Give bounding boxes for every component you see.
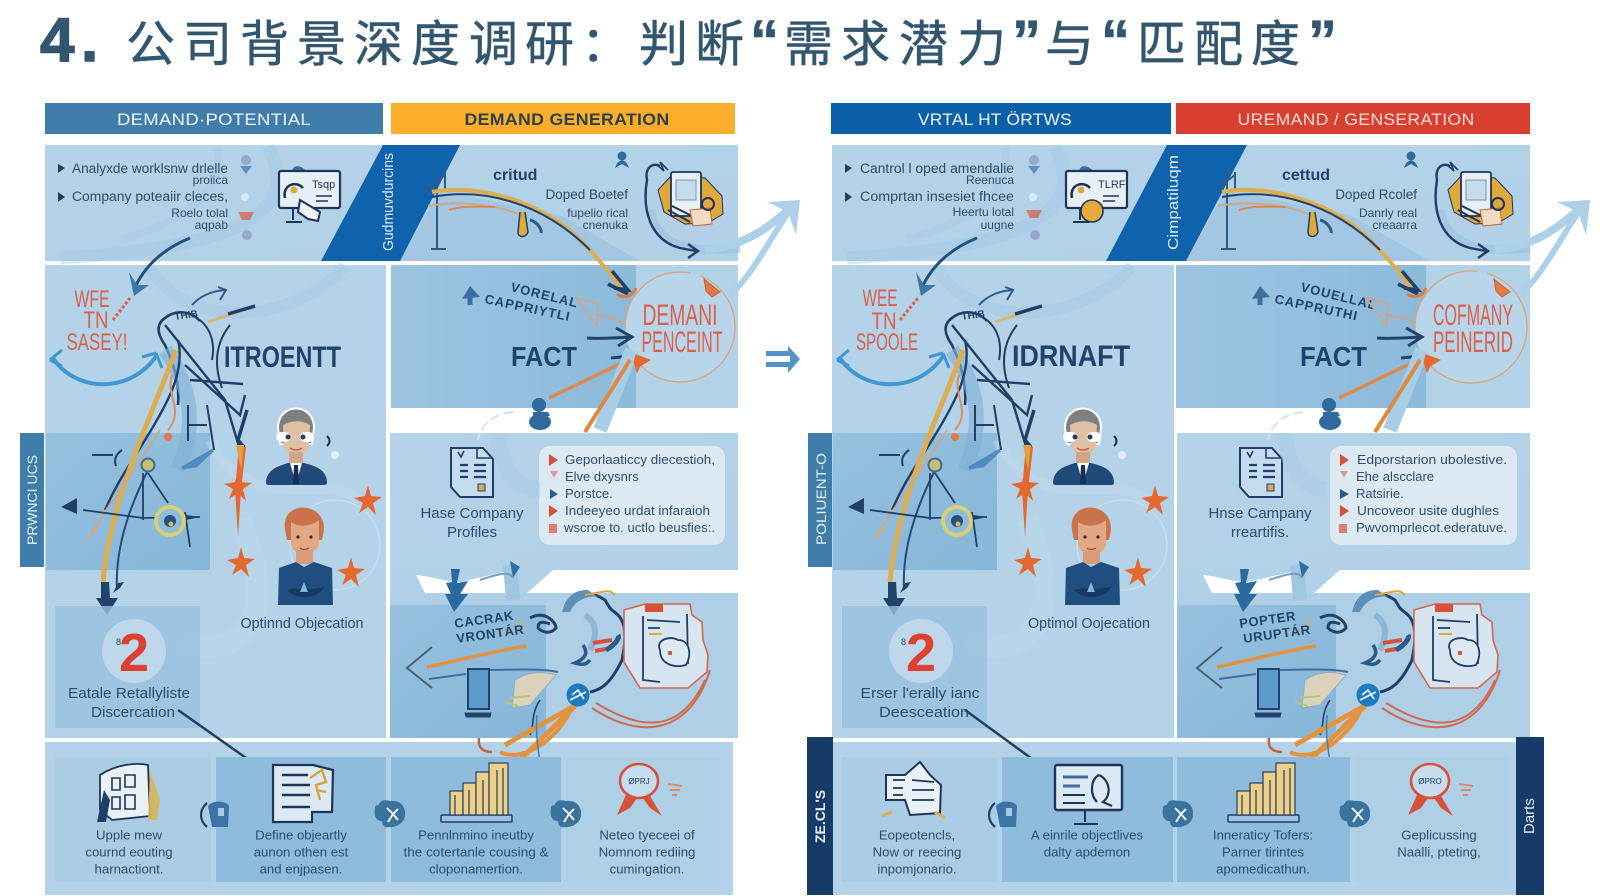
- bullet list: top left: [845, 161, 1014, 232]
- circle: red lettering: PEINERID: [1433, 326, 1513, 359]
- bullet list: top left: Reenuca: [966, 173, 1014, 187]
- caption: person: Optinnd Objecation: [240, 615, 364, 632]
- bullet list: top left: [58, 161, 228, 232]
- text: cettud block: cettud: [1282, 167, 1330, 184]
- card: step 4: Nomnom rediing: [599, 844, 695, 860]
- card: step 4: [1355, 757, 1510, 882]
- handwritten label: lower sketch: [1238, 608, 1312, 646]
- person marker: [478, 398, 551, 440]
- red handwritten note: TN: [84, 307, 108, 334]
- handwritten labels: VORELAL: [509, 279, 580, 311]
- title: ”: [1308, 9, 1337, 74]
- card: step 4: ØPRO: [1418, 777, 1442, 786]
- handwritten label: lower sketch: POPTER: [1238, 608, 1297, 631]
- header: demand generation: DEMAND GENERATION: [464, 110, 670, 129]
- bullet list: top left: Analyxde worklsnw drlelle: [72, 161, 228, 176]
- handwritten label: lower sketch: CACRAK: [453, 608, 515, 631]
- panel: lower sketch block: [390, 593, 738, 738]
- icon: monitor with hand: Tsqp: [312, 179, 335, 191]
- icon: package sketch: [658, 172, 723, 226]
- handwritten labels: VOUELLAL: [1299, 279, 1379, 313]
- icon: report: [1414, 604, 1498, 688]
- right layout: [807, 103, 1590, 895]
- card: number 2: [55, 606, 200, 728]
- top centre curves: [1215, 170, 1426, 296]
- panel: bottom band: [833, 742, 1516, 895]
- icon: report: [624, 604, 708, 688]
- caption: company profiles: [1208, 505, 1312, 541]
- arrow between the two layouts: [766, 346, 800, 373]
- title: 公司背景深度调研：判断: [126, 18, 744, 72]
- card: step 4: [566, 757, 720, 882]
- arrow: package loop: [1436, 162, 1530, 258]
- callout: bullet list: [1330, 446, 1517, 545]
- card: step 4: Neteo tyeceei of: [599, 828, 695, 842]
- side tab: principles: [20, 433, 44, 567]
- card: step 2: [216, 757, 386, 882]
- person: young man: [278, 500, 380, 605]
- title: 匹配度: [1137, 18, 1300, 72]
- card: step 2: aunon othen est: [254, 844, 349, 860]
- arrow: big light arrow: [1495, 200, 1590, 296]
- header: virtual: VRTAL HT ÖRTWS: [918, 110, 1072, 129]
- card: step 1: [55, 757, 211, 882]
- card: step 2: Define objeartly: [255, 828, 347, 842]
- arrow: long diagonal: [178, 710, 266, 772]
- handwritten labels: [483, 279, 580, 324]
- icon: document: [1240, 448, 1282, 497]
- person: consultant: [266, 408, 339, 485]
- connector icons: [989, 800, 1370, 827]
- handwritten label: lower sketch: URUPTÁR: [1242, 622, 1312, 646]
- bullet list: top left: Company poteaiir cleces,: [72, 189, 228, 204]
- red handwritten note: [66, 286, 130, 356]
- card: number 2: Erser l'erally ianc: [860, 685, 980, 702]
- card: number 2: 8: [901, 637, 906, 647]
- card: step 3: Parner tirintes: [1222, 844, 1304, 860]
- text: cettud block: Danrly real: [1359, 206, 1417, 220]
- card: step 4: Geplicussing: [1401, 828, 1477, 842]
- text: critud block: cnenuka: [583, 218, 628, 232]
- caption: company profiles: Profiles: [447, 524, 497, 541]
- callout: bullet list: Elve dxysnrs: [565, 469, 639, 484]
- navy side tab: bottom right: Darts: [1521, 798, 1538, 834]
- red handwritten note: WFE: [74, 286, 110, 313]
- title: “: [1101, 9, 1130, 74]
- label: fact: FACT: [511, 341, 577, 372]
- callout: bullet list: Geporlaaticcy diecestioh,: [565, 452, 715, 467]
- red handwritten note: [856, 285, 918, 356]
- panel: company profiles block: [1177, 433, 1530, 570]
- side tab: left: [808, 433, 832, 567]
- icon: document: [451, 448, 493, 497]
- circle: red lettering: COFMANY: [1433, 299, 1513, 332]
- side tab: left: POLIUENT-O: [813, 453, 829, 545]
- title: “: [750, 9, 779, 74]
- caption: company profiles: [420, 505, 524, 541]
- card: step 1: harnactiont.: [95, 862, 163, 876]
- text: critud block: critud: [493, 167, 537, 184]
- card: step 4: Naalli, pteting,: [1397, 844, 1481, 860]
- small network label: THIB: [174, 309, 199, 323]
- top centre curves: [425, 170, 636, 296]
- panel: company profiles block: [390, 433, 738, 570]
- card: step 3: [391, 757, 561, 882]
- callout: bullet list: Porstce.: [565, 486, 613, 501]
- panel: fact block: [391, 265, 738, 408]
- decorative bands: [847, 147, 1147, 647]
- text: critud block: [493, 152, 629, 232]
- bullet list: top left: proiica: [193, 173, 228, 187]
- red handwritten note: SPOOLE: [856, 329, 918, 356]
- caption: company profiles: Hnse Campany: [1208, 505, 1312, 522]
- handwritten labels: CAPPRIYTLI: [483, 291, 572, 324]
- navy side tab: bottom left: [807, 737, 833, 895]
- circle: red lettering: [1415, 271, 1527, 383]
- caption: company profiles: rreartifis.: [1231, 524, 1289, 541]
- header: demand generation: [391, 103, 735, 134]
- text: cettud block: creaarra: [1372, 218, 1417, 232]
- lower sketch: [407, 590, 710, 775]
- panel: large left block: [832, 265, 1174, 738]
- card: step 1: [842, 757, 997, 882]
- circle: red lettering: PENCEINT: [642, 326, 722, 359]
- header: virtual: [831, 103, 1171, 134]
- orange stars: [1011, 471, 1169, 587]
- arrow: dark curve and blue arc: [50, 238, 190, 384]
- card: step 4: ØPRJ: [628, 777, 650, 786]
- card: step 3: Pennlnmino ineutby: [418, 828, 534, 842]
- card: step 3: the cotertanle cousing &: [404, 844, 549, 860]
- arrow: package loop: [646, 162, 740, 258]
- card: number 2: 8: [116, 637, 121, 647]
- card: number 2: Deesceation: [879, 704, 969, 721]
- card: step 2: [1002, 757, 1173, 882]
- callout: bullet list: Ratsirie.: [1356, 486, 1404, 501]
- card: number 2: 2: [119, 623, 149, 683]
- card: step 3: apomedicathun.: [1216, 862, 1310, 876]
- title: 需求潜力: [784, 18, 1006, 72]
- bullet list: top left: Cantrol l oped amendalie: [860, 161, 1014, 176]
- slanted blue tab: [1106, 145, 1247, 261]
- card: step 2: A einrile objectlives: [1031, 828, 1143, 842]
- connector icons: [201, 800, 581, 827]
- card: step 4: cumingation.: [610, 862, 684, 876]
- slanted blue tab: [321, 145, 460, 261]
- arrow: dark curve and blue arc: [837, 238, 977, 384]
- callout: bullet list: Pwvomprlecot.ederatuve.: [1356, 520, 1507, 535]
- navy side tab: bottom right: [1516, 737, 1544, 895]
- header: demand potential: [45, 103, 383, 134]
- panel: wedge behind curves: [400, 190, 640, 261]
- card: number 2: Discercation: [91, 704, 175, 721]
- callout: bullet list: [539, 446, 725, 545]
- orange stars: [224, 471, 382, 587]
- connector fill between blocks: [1177, 434, 1340, 600]
- connector fill between blocks: [390, 434, 553, 600]
- icon: monitor with bulb: TLRF: [1098, 179, 1126, 191]
- network diagram: [848, 287, 1042, 615]
- arrow: long diagonal: [965, 710, 1050, 772]
- title: 与: [1045, 18, 1094, 72]
- arrows between blocks: [445, 561, 520, 612]
- panel: wedge behind curves: [1186, 190, 1430, 261]
- red handwritten note: SASEY!: [66, 329, 128, 356]
- handwritten label: lower sketch: [453, 608, 525, 646]
- title: 4.: [40, 6, 98, 75]
- card: number 2: Eatale Retallyliste: [68, 685, 190, 702]
- icon: monitor with hand: [279, 166, 340, 222]
- network diagram: [61, 287, 255, 615]
- decorative bands: [60, 147, 360, 647]
- small network label: THIB: [961, 309, 986, 323]
- large label: ITROENTT: [224, 341, 341, 374]
- card: step 1: inpomjonario.: [877, 862, 957, 876]
- bullet list: top left: Roelo tolal: [171, 206, 228, 220]
- text: critud block: fupelio rical: [567, 206, 628, 220]
- callout: bullet list: Indeeyeo urdat infaraioh: [565, 503, 710, 518]
- handwritten labels: [1273, 279, 1379, 324]
- person marker: [1268, 398, 1341, 440]
- panel: lower sketch block: [1177, 593, 1530, 738]
- left layout: [20, 103, 800, 895]
- label: fact: FACT: [1300, 341, 1367, 372]
- card: step 1: cournd eouting: [85, 844, 173, 860]
- card: step 3: Inneraticy Tofers:: [1213, 828, 1313, 842]
- card: step 2: and enjpasen.: [260, 862, 342, 876]
- card: step 1: Upple mew: [96, 828, 162, 842]
- small icons column: [1026, 155, 1042, 240]
- lower sketch: [1197, 590, 1500, 775]
- caption: company profiles: Hase Company: [420, 505, 524, 522]
- panel: dark upper-left block: [833, 433, 997, 570]
- small icons column: [238, 155, 254, 240]
- title: ”: [1012, 9, 1041, 74]
- handwritten labels: CAPPRUTHI: [1273, 291, 1359, 324]
- text: critud block: Doped Boetef: [545, 187, 628, 202]
- arrows into circle: [462, 279, 720, 432]
- slanted blue tab: Gudmuvdurcins: [380, 153, 397, 251]
- person: young man: [1065, 500, 1167, 605]
- card: number 2: [842, 606, 987, 728]
- icon: monitor with bulb: [1066, 166, 1127, 222]
- panel: fact block: [1176, 265, 1530, 408]
- panel: bottom band: [45, 742, 733, 895]
- bullet list: top left: Comprtan insesiet fhcee: [860, 189, 1014, 204]
- card: step 3: [1177, 757, 1350, 882]
- panel: top band: [832, 145, 1530, 261]
- large label: IDRNAFT: [1012, 340, 1130, 373]
- text: cettud block: [1282, 152, 1418, 232]
- header: uremand: UREMAND / GENSERATION: [1238, 110, 1474, 129]
- handwritten label: lower sketch: VRONTÁR: [455, 622, 525, 646]
- callout: bullet list: Ehe alscclare: [1356, 469, 1434, 484]
- panel: dark upper-left block: [46, 433, 210, 570]
- navy side tab: bottom left: ZE.CL'S: [812, 790, 828, 843]
- bullet list: top left: uugne: [981, 218, 1014, 232]
- card: number 2: 2: [906, 623, 936, 683]
- side tab: principles: PRWNCI UCS: [24, 455, 40, 545]
- slanted blue tab: Cimpatiluqm: [1165, 155, 1182, 250]
- red handwritten note: TN: [872, 308, 896, 335]
- arrows into circle: [1252, 279, 1510, 432]
- card: step 2: dalty apdemon: [1044, 844, 1130, 860]
- red handwritten note: WEE: [862, 285, 898, 312]
- bullet list: top left: Heertu lotal: [953, 205, 1014, 219]
- circle: red lettering: DEMANI: [642, 299, 718, 332]
- panel: top band: [45, 145, 738, 261]
- card: step 1: Eopeotencls,: [879, 828, 955, 842]
- callout: bullet list: Uncoveor usite dughles: [1357, 503, 1500, 518]
- header: uremand: [1176, 103, 1530, 134]
- card: step 1: Now or reecing: [873, 844, 961, 860]
- circle: red lettering: [625, 272, 735, 382]
- text: cettud block: Doped Rcolef: [1335, 187, 1417, 202]
- bullet list: top left: aqpab: [195, 218, 228, 232]
- header: demand potential: DEMAND·POTENTIAL: [117, 110, 311, 129]
- callout: bullet list: Edporstarion ubolestive.: [1357, 452, 1507, 467]
- arrows between blocks: [1234, 561, 1309, 612]
- panel: large left block: [45, 265, 386, 738]
- person: consultant: [1053, 408, 1126, 485]
- icon: package sketch: [1448, 172, 1513, 226]
- caption: person: Optimol Oojecation: [1028, 615, 1150, 632]
- card: step 3: cloponamertion.: [429, 862, 523, 876]
- callout: bullet list: wscroe to. uctlo beusfies:.: [563, 520, 715, 535]
- arrow: big light arrow: [705, 200, 800, 296]
